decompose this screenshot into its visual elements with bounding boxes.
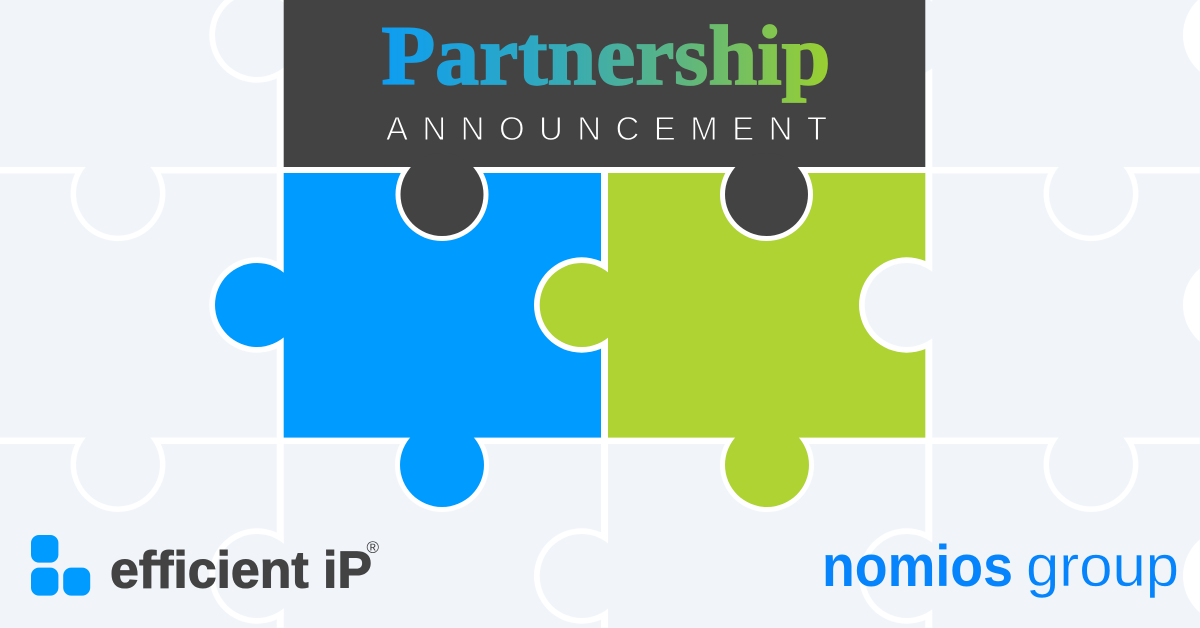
registered mark: ® xyxy=(366,538,380,557)
title: Partnership: Partnership xyxy=(382,9,830,103)
wordmark: group: group xyxy=(1026,534,1179,599)
green puzzle piece xyxy=(534,173,954,512)
logo: efficient iP xyxy=(31,535,380,600)
subtitle: Announcement: ANNOUNCEMENT xyxy=(386,110,827,147)
icon: efficient iP blocks xyxy=(31,535,90,596)
wordmark: nomios: nomios xyxy=(822,534,1013,599)
dark header puzzle piece xyxy=(284,0,925,241)
wordmark: efficient iP: efficient iP xyxy=(110,542,372,600)
logo: nomios group xyxy=(822,534,1179,599)
blue puzzle piece xyxy=(209,173,601,512)
